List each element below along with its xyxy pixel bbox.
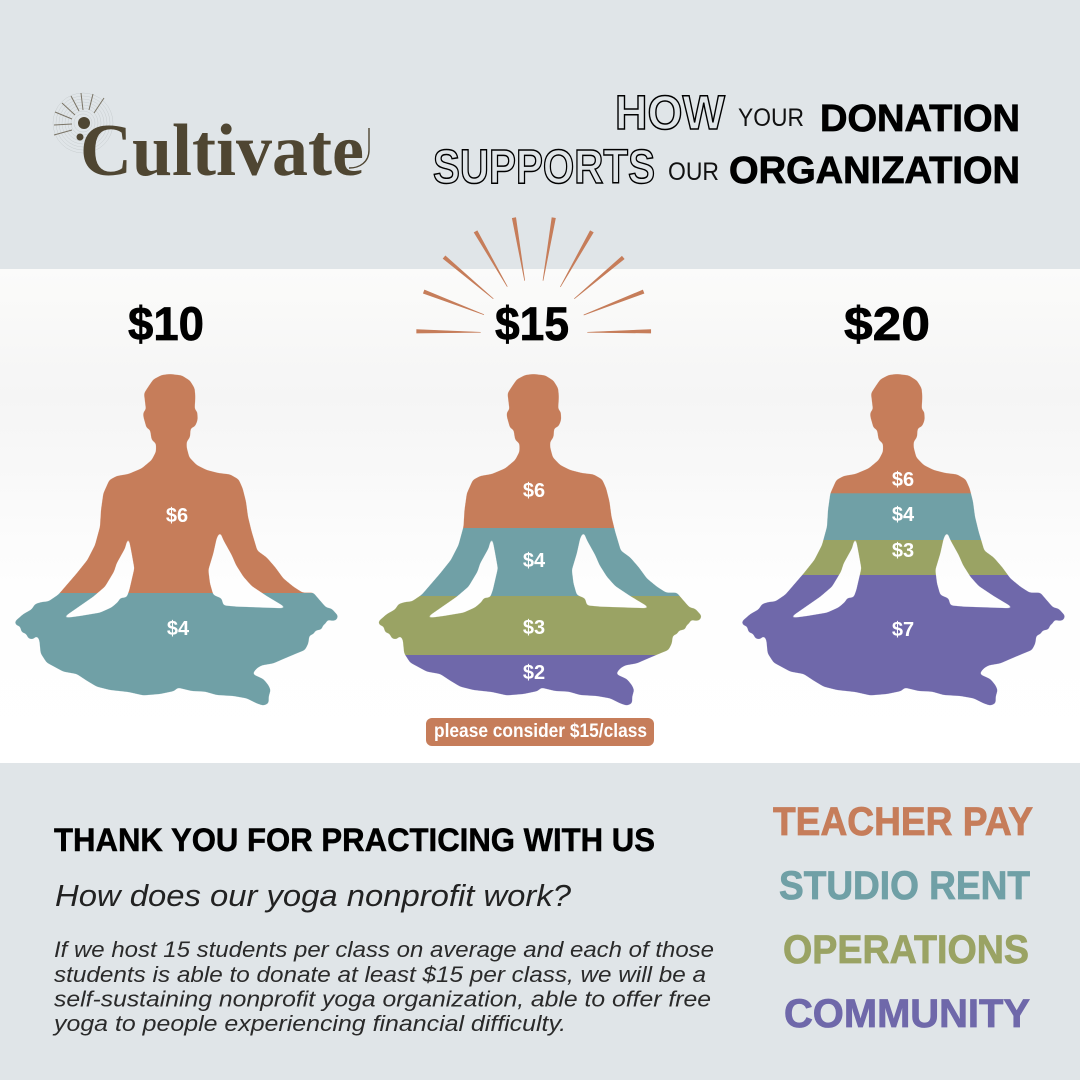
- explanatory paragraph: If we host 15 students per class on average and each of those: [54, 937, 714, 962]
- explanatory paragraph: students is able to donate at least $15 per class, we will be a: [54, 962, 706, 987]
- panel: central donation tiers band: [0, 269, 1080, 763]
- amount labels: $3: [523, 617, 545, 639]
- logo sun rings: [53, 93, 113, 153]
- amount labels: $6: [892, 469, 914, 491]
- legend: [773, 800, 1033, 1036]
- amount labels: [523, 480, 546, 684]
- callout: please consider $15/class: please consider $15/class: [434, 721, 647, 742]
- logo sun rays: [54, 93, 104, 135]
- amount labels: $7: [892, 619, 914, 641]
- logo wordmark: Cultivate: [80, 110, 364, 192]
- explanatory paragraph: yoga to people experiencing financial difficulty.: [52, 1011, 566, 1036]
- amount labels: $6: [523, 480, 545, 502]
- title line 2: OUR: [668, 158, 719, 186]
- silhouette split: $6, $4, $3, $2: [378, 374, 702, 706]
- tier: $20: [742, 304, 1065, 706]
- heading: thank you: THANK YOU FOR PRACTICING WITH US: [54, 822, 655, 858]
- price: $15: $15: [495, 297, 569, 350]
- sunburst rays around $15: [417, 218, 651, 333]
- subheading: how does it work: How does our yoga nonprofit work?: [55, 878, 572, 913]
- explanatory paragraph: [52, 937, 714, 1036]
- silhouette split: $6 teacher pay, $4 studio rent: [15, 374, 338, 706]
- title line 2: [433, 141, 1020, 194]
- legend: operations: OPERATIONS: [783, 928, 1029, 972]
- explanatory paragraph: self-sustaining nonprofit yoga organization, able to offer free: [54, 986, 711, 1012]
- amount labels: [892, 469, 915, 641]
- logo tail flourish: [349, 128, 369, 168]
- amount labels: $3: [892, 540, 914, 562]
- amount labels: $4: [167, 618, 190, 640]
- price: $20: $20: [844, 297, 930, 350]
- amount labels: $4: [892, 504, 915, 526]
- silhouette split: $6, $4, $3, $7: [742, 374, 1065, 706]
- title: [433, 87, 1020, 194]
- amount labels: $4: [523, 550, 546, 572]
- title line 1: [615, 87, 1020, 140]
- title line 2: ORGANIZATION: [729, 150, 1020, 192]
- logo: Cultivate: [53, 93, 369, 192]
- legend: teacher pay: TEACHER PAY: [773, 800, 1033, 844]
- logo dots: [76, 117, 90, 140]
- title line 1: YOUR: [738, 104, 804, 132]
- price: $10: $10: [128, 297, 204, 350]
- legend: community: COMMUNITY: [784, 992, 1030, 1036]
- title line 1: DONATION: [820, 98, 1020, 140]
- title line 2: SUPPORTS: [433, 141, 655, 194]
- amount labels: $2: [523, 662, 545, 684]
- tier: $15: [378, 304, 702, 746]
- amount labels: [166, 505, 190, 640]
- callout: please consider $15/class: [426, 718, 654, 746]
- amount labels: $6: [166, 505, 188, 527]
- legend: studio rent: STUDIO RENT: [779, 864, 1030, 908]
- title line 1: HOW: [615, 87, 726, 140]
- tier: $10: [15, 304, 338, 706]
